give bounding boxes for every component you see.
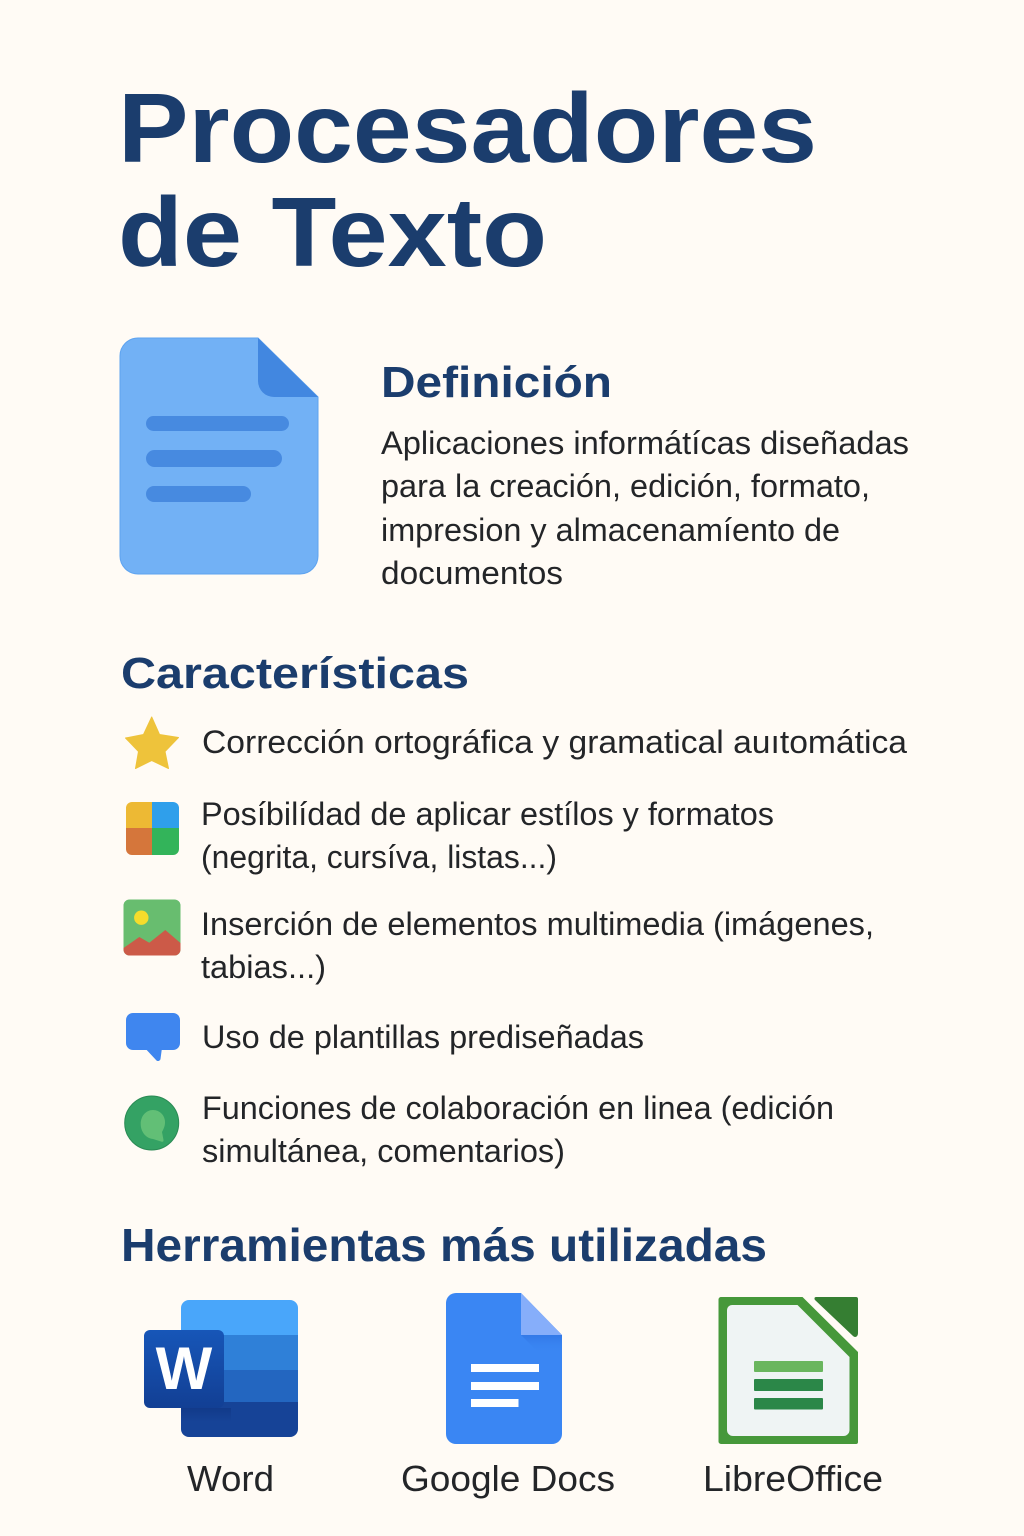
item: multimedia: tabias...) [201,949,326,985]
heading: Características: Características [121,649,469,698]
item: spelling correction: Corrección ortográfica y gramatical auıtomática [202,724,907,760]
title: de Texto [118,177,547,287]
text block: definition: Aplicaciones informátícas diseñadas [381,425,909,461]
item: templates: Uso de plantillas prediseñadas [202,1019,644,1055]
heading: Definición: Definición [381,358,612,407]
icon: collaboration [125,1096,179,1150]
title [118,73,817,287]
icon: star [126,717,178,768]
text block: definition [381,425,909,591]
text block: definition: para la creación, edición, formato, [381,468,870,504]
item: styles and formats: Posíbilídad de aplicar estílos y formatos [201,796,774,832]
item: online collaboration: Funciones de colaboración en linea (edición [202,1090,834,1126]
label: LibreOffice: LibreOffice [703,1458,883,1499]
item: online collaboration: simultánea, comentarios) [202,1133,565,1169]
word letter: W [156,1335,213,1402]
item: styles and formats [201,796,774,875]
title: Procesadores [118,73,817,183]
item: multimedia [201,906,874,985]
item: online collaboration [202,1090,834,1169]
item: multimedia: Inserción de elementos multimedia (imágenes, [201,906,874,942]
heading: Herramientas más utilizadas: Herramientas más utilizadas [121,1219,767,1271]
label: Google Docs: Google Docs [401,1458,615,1499]
icon: image [124,900,180,956]
text block: definition: impresion y almacenamíento de [381,512,840,548]
icon: speech bubble [126,1013,180,1061]
icon: colour palette [126,802,179,855]
text block: definition: documentos [381,555,563,591]
label: Word: Word [187,1458,274,1499]
icon: Google Docs [446,1293,562,1444]
icon: Word [144,1300,298,1437]
icon: document [120,338,318,574]
item: styles and formats: (negrita, cursíva, listas...) [201,839,557,875]
icon: LibreOffice [718,1297,858,1444]
